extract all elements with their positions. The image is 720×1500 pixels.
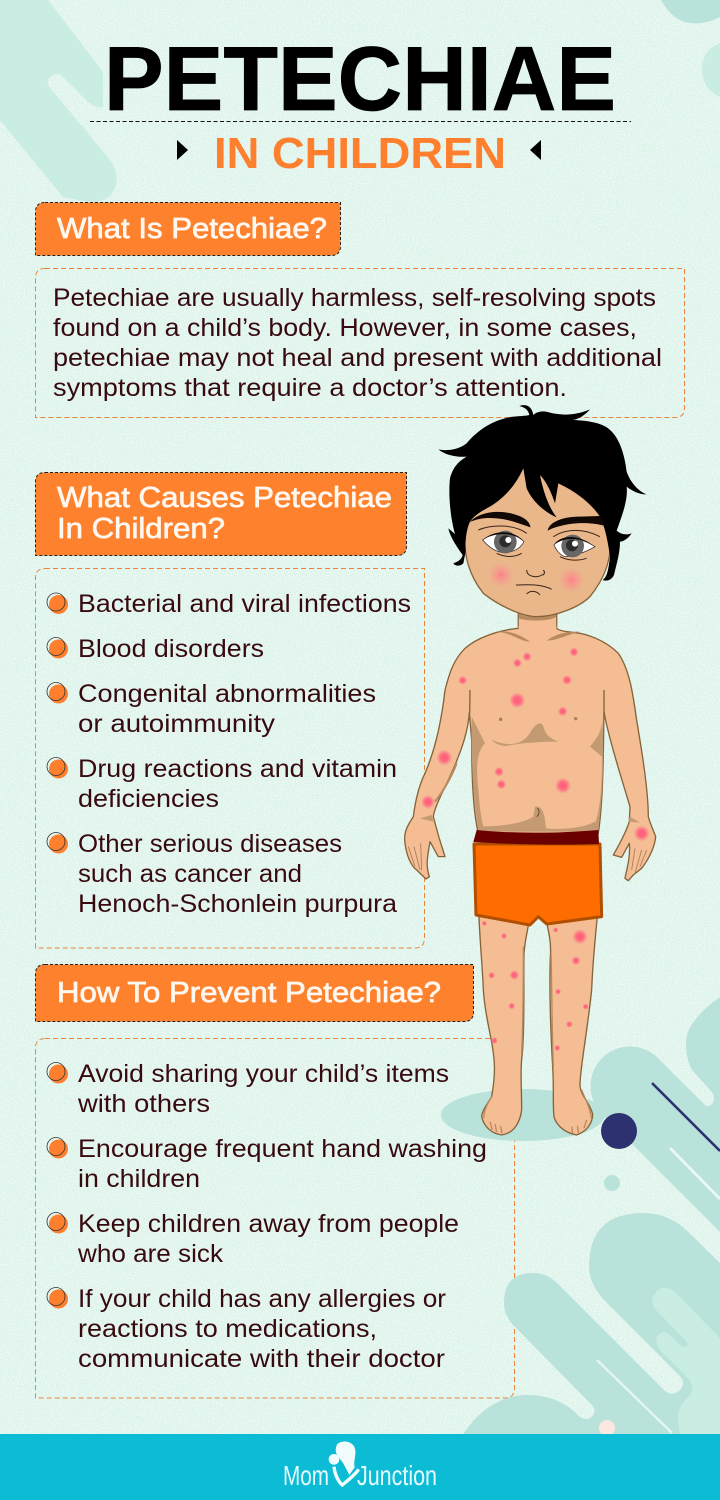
list: causes — [47, 590, 411, 918]
footer bar — [0, 1434, 720, 1500]
torso and arms — [405, 610, 656, 881]
text block: what is petechiae — [53, 284, 662, 402]
list: prevention: in children — [78, 1165, 200, 1193]
shorts — [473, 830, 602, 925]
text block: what is petechiae: petechiae may not heal and present with additional — [53, 344, 662, 372]
small teal circle — [604, 1175, 620, 1191]
list: causes: Drug reactions and vitamin — [78, 755, 397, 783]
list: prevention: who are sick — [77, 1240, 224, 1268]
title: PETECHIAE — [104, 29, 616, 130]
decorative blob: top left — [0, 0, 117, 202]
text box: what is petechiae outline — [36, 268, 684, 418]
text box: causes outline — [36, 568, 424, 948]
list: causes: Blood disorders — [78, 635, 264, 663]
list: causes: Other serious diseases — [78, 830, 342, 858]
heading: how to prevent — [36, 964, 474, 1022]
heading: what is petechiae — [36, 202, 340, 256]
list: prevention: If your child has any allergies or — [78, 1285, 446, 1313]
decorative blob: top right — [661, 0, 720, 97]
subtitle: in children — [90, 122, 631, 178]
list: causes: or autoimmunity — [78, 710, 276, 738]
logo: MomJunction: Mom — [283, 1460, 329, 1491]
text box: prevention outline — [36, 1038, 514, 1398]
list: causes: Henoch-Schonlein purpura — [78, 890, 397, 918]
heading: what causes: What Causes Petechiae — [57, 482, 392, 514]
heading: what causes — [36, 472, 406, 556]
logo: MomJunction: Junction — [357, 1460, 437, 1491]
child figure with petechiae spots — [405, 405, 656, 1135]
subtitle: in children: IN CHILDREN — [214, 129, 506, 178]
heading: how to prevent: How To Prevent Petechiae? — [57, 977, 441, 1009]
petechiae spots: legs — [482, 921, 589, 1051]
list: prevention: Keep children away from people — [78, 1210, 459, 1238]
decorative blobs: bottom right — [463, 997, 720, 1436]
petechiae spots: torso and arms — [421, 648, 649, 841]
list: prevention: Encourage frequent hand washing — [78, 1135, 487, 1163]
list: prevention: reactions to medications, — [78, 1315, 377, 1343]
list: prevention: Avoid sharing your child’s items — [78, 1060, 449, 1088]
list: prevention: with others — [77, 1090, 210, 1118]
heading: what causes: In Children? — [57, 513, 225, 545]
logo: MomJunction — [283, 1442, 437, 1491]
list: prevention: communicate with their doctor — [78, 1345, 445, 1373]
leg shading and toes — [484, 947, 591, 1133]
head — [438, 405, 647, 642]
text block: what is petechiae: symptoms that require a doctor’s attention. — [53, 374, 567, 402]
floor shadow — [441, 1089, 605, 1141]
heading: what is petechiae: What Is Petechiae? — [57, 213, 327, 245]
legs — [479, 917, 597, 1135]
text block: what is petechiae: found on a child’s body. However, in some cases, — [53, 314, 637, 342]
list: prevention — [47, 1060, 487, 1373]
list: causes: Bacterial and viral infections — [78, 590, 411, 618]
navy circle — [601, 1113, 637, 1149]
list: causes: Congenital abnormalities — [78, 680, 376, 708]
list: causes: deficiencies — [78, 785, 219, 813]
text block: what is petechiae: Petechiae are usually harmless, self-resolving spots — [53, 284, 656, 312]
list: causes: such as cancer and — [78, 860, 302, 888]
